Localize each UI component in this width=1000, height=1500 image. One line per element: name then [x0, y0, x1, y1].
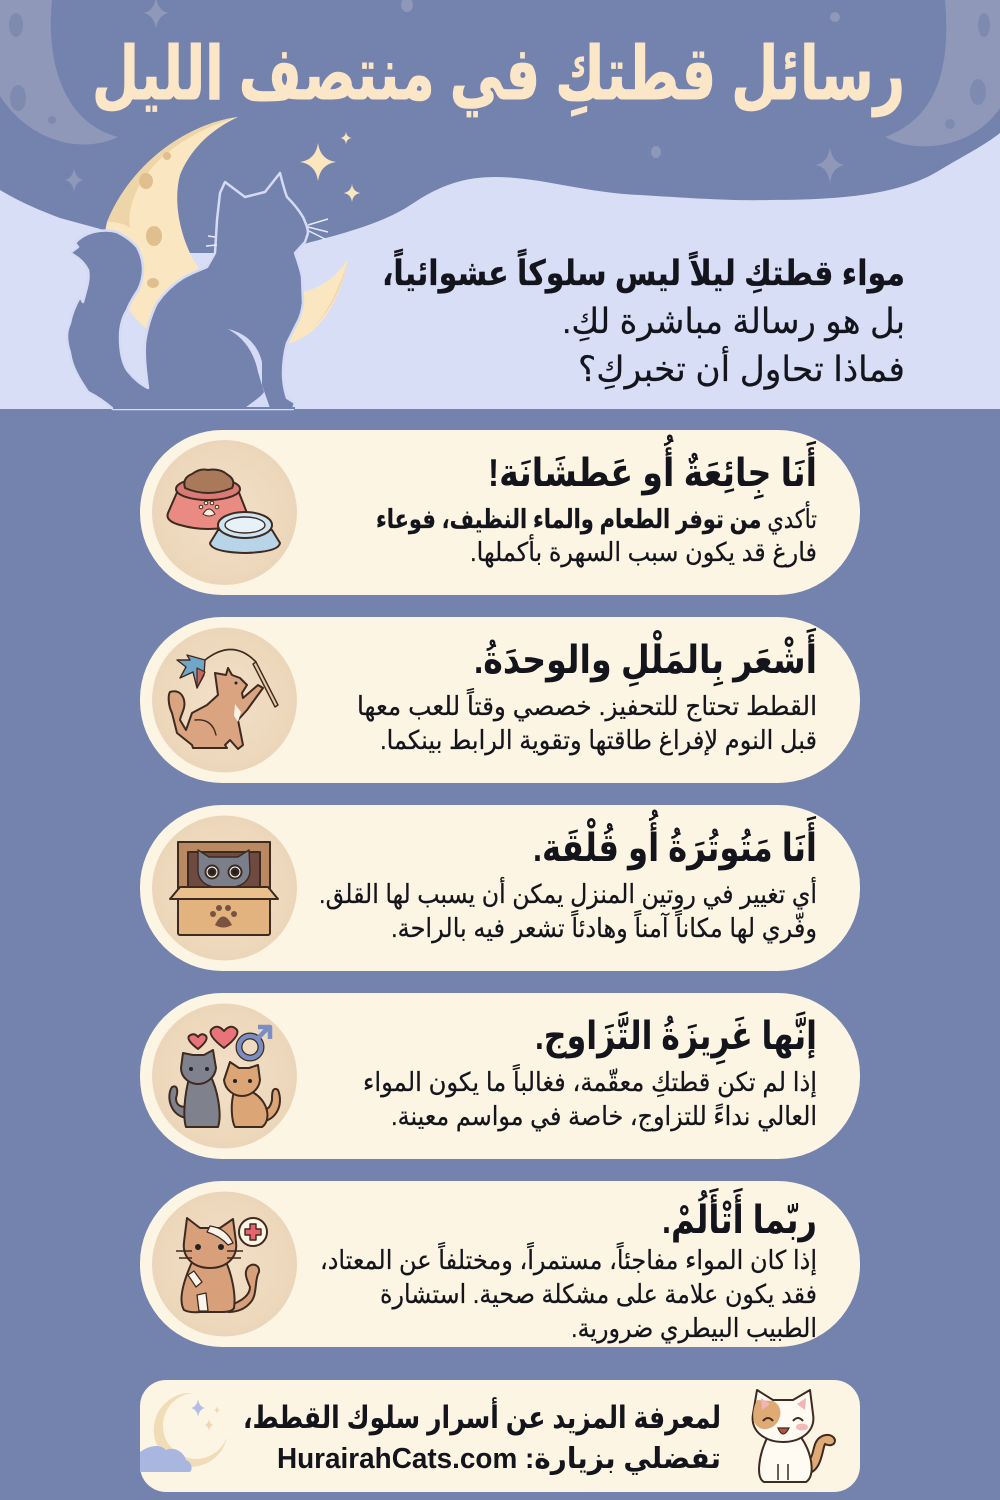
intro text: مواء قطتكِ ليلاً ليس سلوكاً عشوائياً، [382, 248, 905, 294]
left corner crescent [0, 0, 118, 144]
card 3 body: أي تغيير في روتين المنزل يمكن أن يسبب لها القلق. [319, 876, 817, 910]
card 5 body [320, 1241, 817, 1344]
icon: cream stars [300, 132, 361, 202]
footer text: تفضلي بزيارة: HurairahCats.com [277, 1443, 721, 1475]
icon: cat in a box [152, 816, 297, 960]
intro text: فماذا تحاول أن تخبركِ؟ [578, 346, 905, 390]
footer text: لمعرفة المزيد عن أسرار سلوك القطط، [243, 1397, 721, 1436]
card 4 heading: إنَّها غَرِيزَةُ التَّزَاوج. [535, 1011, 817, 1065]
card 1 body: فارغ قد يكون سبب السهرة بأكملها. [470, 533, 817, 568]
card 5 body: فقد يكون علامة على مشكلة صحية. استشارة [380, 1279, 817, 1310]
header: night sky decoration [0, 0, 1000, 192]
card 4 body [363, 1063, 817, 1132]
intro text: بل هو رسالة مباشرة لكِ. [562, 302, 905, 342]
panel: footer call to action [140, 1380, 860, 1492]
panel: bored and lonely [140, 617, 860, 783]
panel: hungry or thirsty [140, 430, 860, 595]
card 5 heading: ربّما أَتْأَلُمْ. [662, 1187, 817, 1243]
right corner crescent [885, 0, 1000, 146]
card 2 body: القطط تحتاج للتحفيز. خصصي وقتاً للعب معها [357, 687, 817, 722]
card 1 body: تأكدي من توفر الطعام والماء النظيف، فوعاء [376, 500, 817, 535]
card 4 body: العالي نداءً للتزاوج، خاصة في مواسم معينة. [391, 1101, 817, 1132]
icon: moon, stars and cloud [140, 1393, 227, 1472]
icon: food and water bowls [152, 440, 297, 585]
panel: mating instinct [140, 993, 860, 1159]
card 5 body: الطبيب البيطري ضرورية. [571, 1313, 817, 1344]
card 2 body: قبل النوم لإفراغ طاقتها وتقوية الرابط بينكما. [380, 725, 817, 756]
icon: crescent moon [104, 117, 348, 350]
card 1 body [376, 500, 817, 568]
footer text [243, 1397, 721, 1475]
panel: stressed or anxious [140, 805, 860, 971]
card 3 body [319, 876, 817, 944]
sky dots and grey stars [9, 0, 990, 192]
card 2 body [357, 687, 817, 756]
card 3 body: وفّري لها مكاناً آمناً وهادئاً تشعر فيه بالراحة. [391, 909, 817, 944]
card 3 heading: أَنَا مَتُوتُرَةُ أُو قُلْقَة. [533, 809, 817, 871]
card 4 body: إذا لم تكن قطتكِ معقّمة، فغالباً ما يكون المواء [363, 1063, 817, 1098]
icon: two cats with hearts [152, 1004, 297, 1148]
panel: pain [140, 1181, 860, 1347]
light wave band [0, 133, 1000, 409]
icon: cat with feather toy [152, 628, 297, 772]
intro text [382, 248, 905, 390]
card 5 body: إذا كان المواء مفاجئاً، مستمراً، ومختلفاً عن المعتاد، [320, 1241, 817, 1276]
card 1 heading: أَنَا جِائِعَةٌ أُو عَطشَانَة! [488, 434, 817, 500]
icon: happy cat [753, 1390, 835, 1482]
icon: injured cat with medical badge [152, 1192, 297, 1336]
icon: cat silhouette [67, 173, 328, 409]
card 2 heading: أَشْعَر بِالمَلْلِ والوحدَةُ. [474, 627, 817, 688]
